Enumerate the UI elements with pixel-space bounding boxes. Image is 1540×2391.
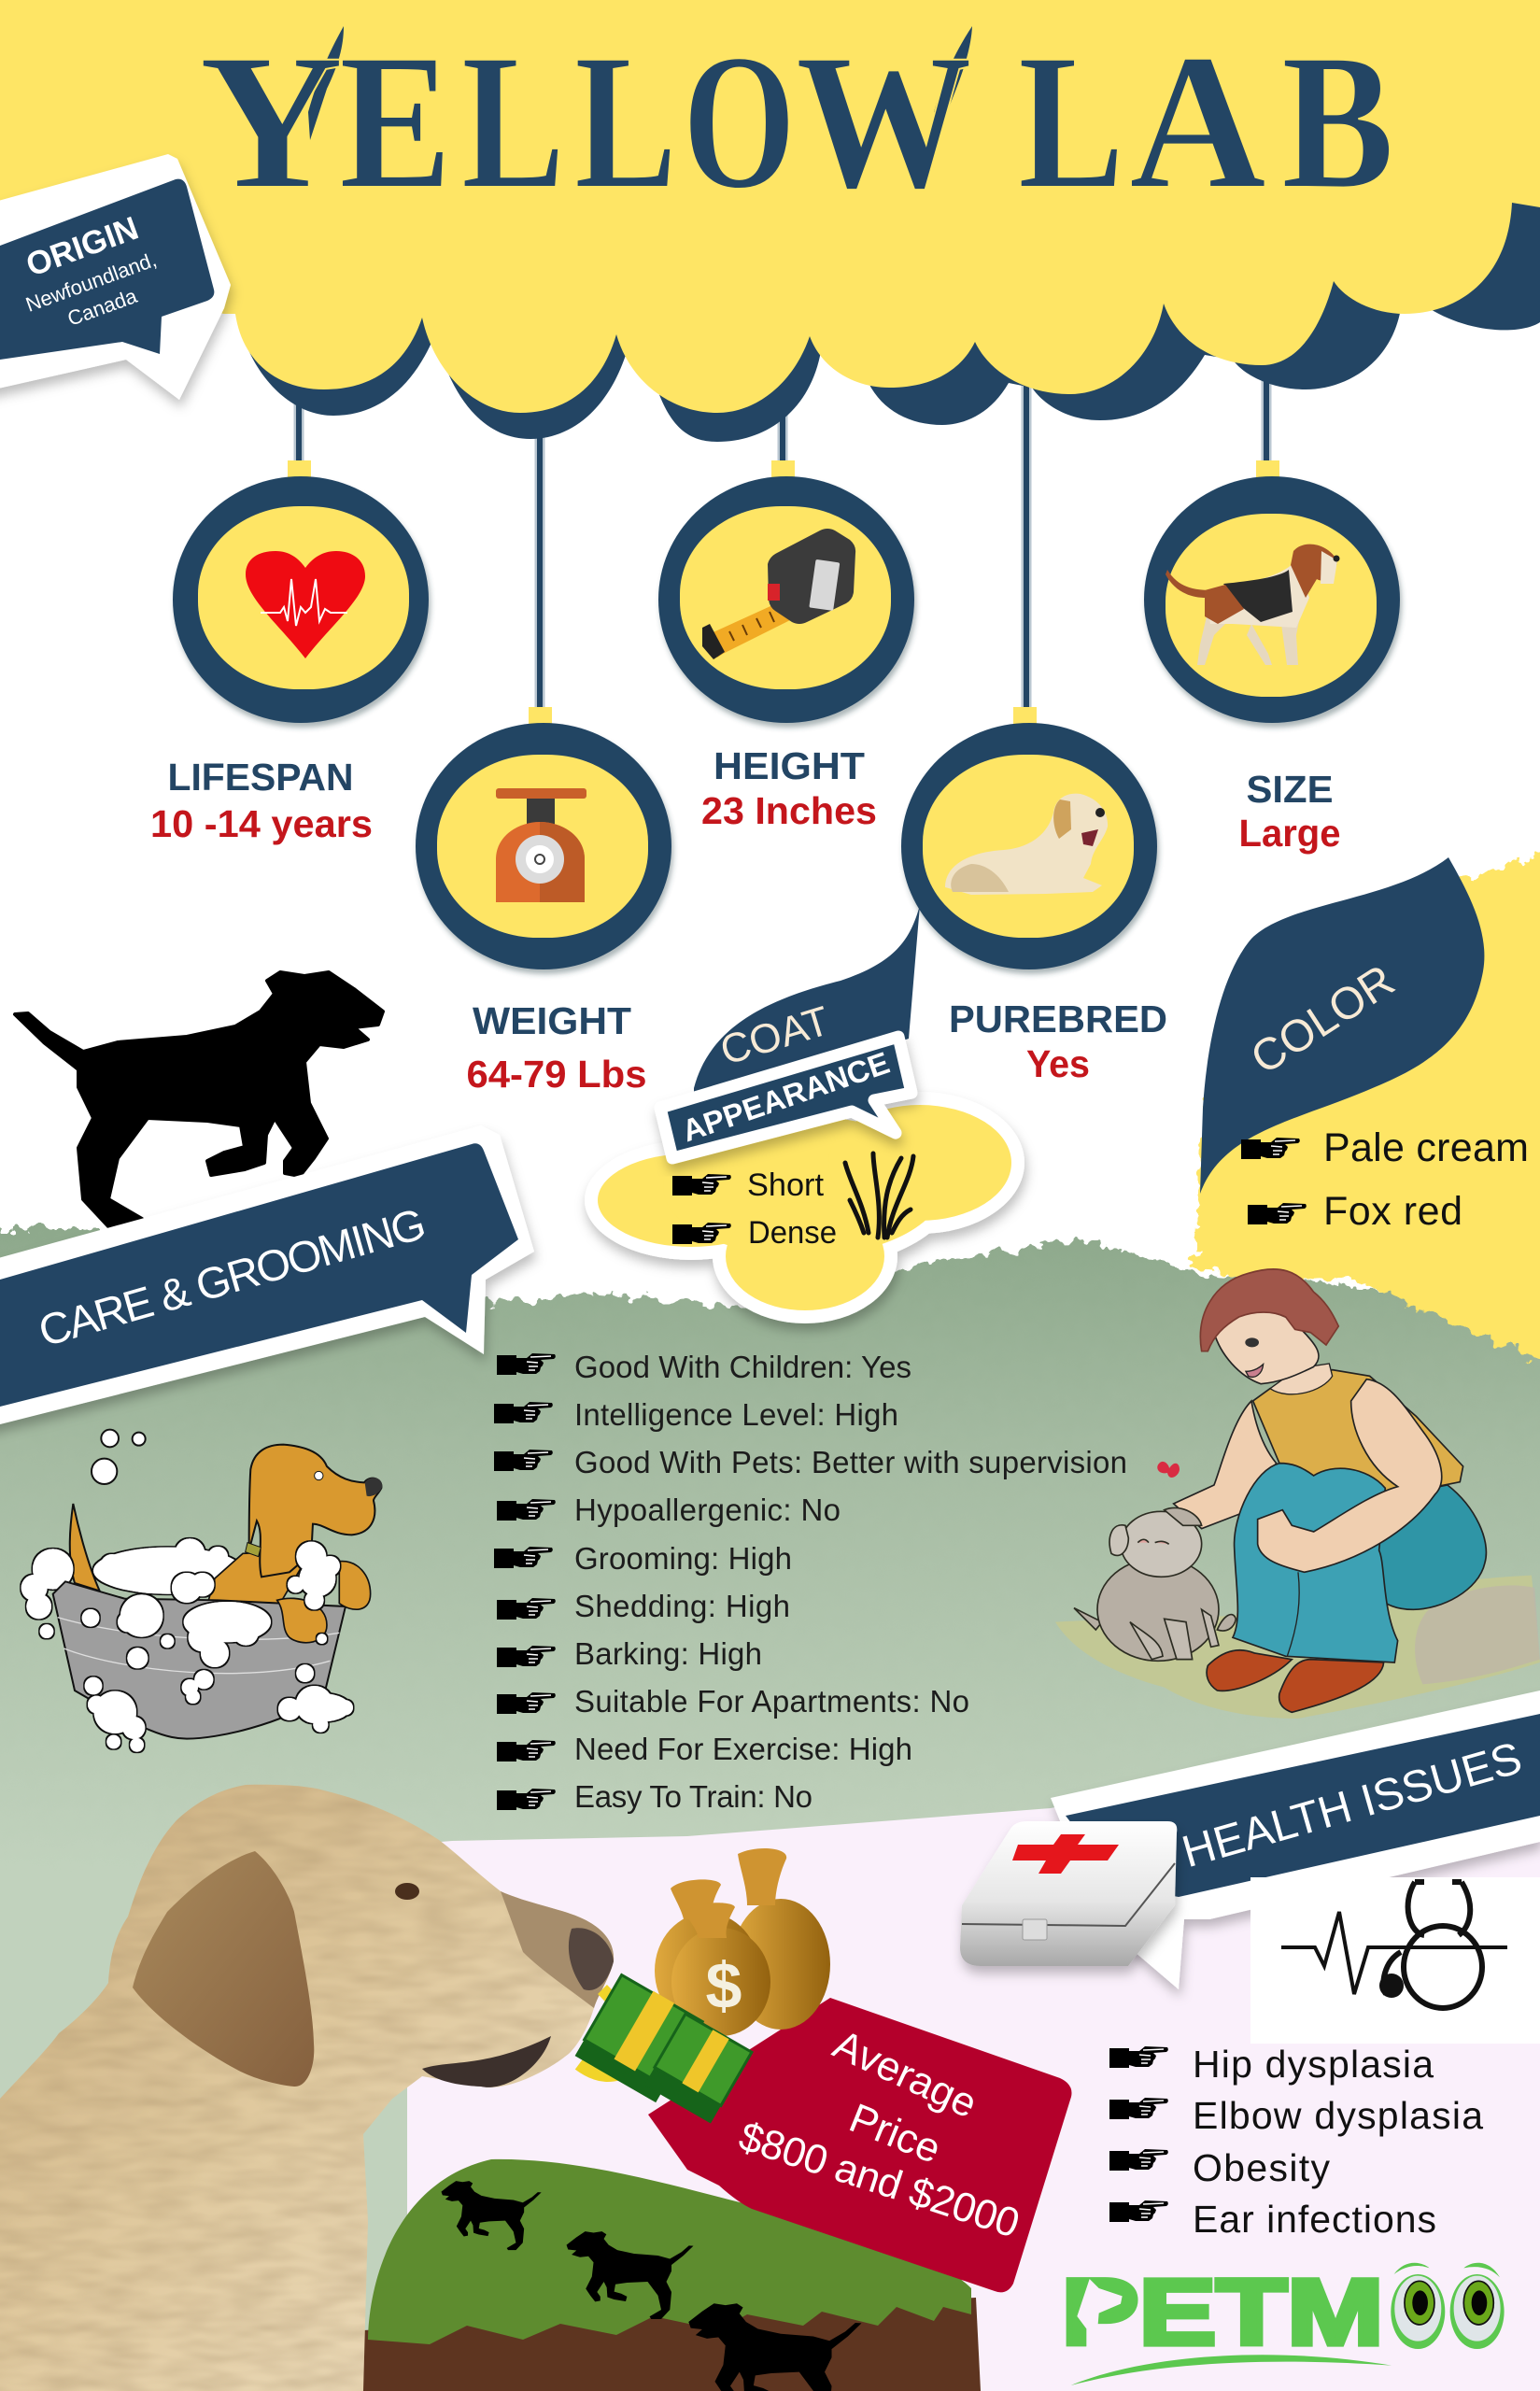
title: L xyxy=(461,14,565,229)
paws xyxy=(277,1562,371,1643)
dog head xyxy=(249,1445,381,1577)
heading: PUREBRED xyxy=(949,997,1167,1040)
appearance banner: APPEARANCE xyxy=(678,1045,894,1148)
icon: beagle xyxy=(1166,545,1339,665)
icon: scale xyxy=(496,788,586,902)
label: weight xyxy=(467,999,646,1096)
neck xyxy=(1270,1364,1333,1394)
body xyxy=(0,1785,614,2391)
front foam xyxy=(82,1542,353,1752)
ground patch xyxy=(1055,1576,1540,1719)
cap xyxy=(1013,707,1037,726)
panel: green meadow background xyxy=(0,1228,1540,2391)
dog body xyxy=(208,1550,311,1604)
label: purebred xyxy=(949,997,1167,1085)
height medallion xyxy=(658,460,914,723)
bullet: dense xyxy=(672,1215,837,1251)
banner: origin xyxy=(0,154,231,400)
stethoscope xyxy=(1383,1882,1482,2008)
illustration: dog in wash tub xyxy=(21,1430,382,1752)
size medallion xyxy=(1144,460,1400,723)
inner xyxy=(923,755,1134,938)
title: L xyxy=(1018,14,1124,229)
ring xyxy=(1144,476,1400,723)
item: Intelligence Level: High xyxy=(574,1397,898,1432)
bullet: fox red xyxy=(1248,1189,1462,1234)
title: W xyxy=(796,14,972,229)
label: size xyxy=(1238,768,1341,855)
care and grooming list xyxy=(494,1350,1127,1814)
heading: HEIGHT xyxy=(713,744,865,787)
back of pants xyxy=(1366,1485,1486,1609)
shirt xyxy=(1253,1370,1463,1501)
title xyxy=(199,14,1394,229)
tag body xyxy=(648,1998,1072,2292)
ring xyxy=(901,723,1157,969)
price tag xyxy=(648,1998,1072,2292)
weight medallion xyxy=(416,707,671,969)
front legs xyxy=(1233,1464,1398,1662)
item: Barking: High xyxy=(574,1636,762,1671)
origin place: Newfoundland, xyxy=(22,248,160,317)
title: B xyxy=(1281,14,1394,229)
dog xyxy=(688,2303,861,2391)
panel: hanging strings xyxy=(299,355,1266,710)
inner xyxy=(437,755,648,938)
value: Large xyxy=(1238,812,1341,855)
color label: COLOR xyxy=(1243,955,1404,1084)
nose xyxy=(569,1928,614,1990)
coat label: COAT xyxy=(715,997,835,1074)
item: Ear infections xyxy=(1193,2198,1436,2241)
title: O xyxy=(683,14,796,229)
nose xyxy=(365,1478,382,1496)
panel: pale pink lower background xyxy=(407,1709,1540,2391)
tag line two: Price xyxy=(843,2095,947,2172)
tag line three: $800 and $2000 xyxy=(734,2114,1024,2247)
leg divide xyxy=(1287,1572,1299,1656)
bullet: short xyxy=(672,1167,825,1203)
banner body xyxy=(1066,1714,1540,1897)
health issues list xyxy=(1109,2043,1483,2241)
label: lifespan xyxy=(150,756,373,845)
banner label: HEALTH ISSUES xyxy=(1177,1733,1527,1877)
inner xyxy=(1166,514,1377,697)
icon: heart xyxy=(246,551,365,658)
tail xyxy=(70,1504,100,1591)
title: E xyxy=(339,14,452,229)
heading: LIFESPAN xyxy=(168,756,353,799)
swoosh xyxy=(1071,2355,1392,2385)
icon: black dog silhouette xyxy=(15,972,383,1226)
item xyxy=(1109,2146,1330,2189)
puppy xyxy=(1074,1508,1236,1661)
bag front xyxy=(671,1903,770,2036)
title: Y xyxy=(199,14,344,229)
banner body xyxy=(0,1143,518,1407)
banner label: CARE & GROOMING xyxy=(33,1198,431,1356)
illustration: money bags and cash xyxy=(575,1848,830,2131)
inner xyxy=(680,506,891,689)
head xyxy=(1214,1311,1319,1384)
collar xyxy=(246,1543,261,1557)
logo: petmoo xyxy=(1062,2260,1505,2385)
icon: lab lying down xyxy=(945,794,1108,895)
item: Hypoallergenic: No xyxy=(574,1493,841,1527)
item: Need For Exercise: High xyxy=(574,1732,912,1766)
dog xyxy=(441,2181,542,2250)
value: 10 -14 years xyxy=(150,802,373,845)
color leaf xyxy=(1200,857,1484,1194)
illustration: hill with running dogs xyxy=(344,2159,981,2391)
eyes xyxy=(1391,2263,1505,2349)
title: L xyxy=(574,14,677,229)
bullet: short: Short xyxy=(747,1167,825,1203)
grass top xyxy=(368,2159,971,2344)
heading: SIZE xyxy=(1246,768,1334,811)
bullet: fox red: Fox red xyxy=(1323,1189,1462,1234)
panel: stethoscope xyxy=(1250,1877,1540,2044)
ring xyxy=(416,723,671,969)
icon: tape measure xyxy=(702,529,855,659)
coat leaf xyxy=(694,905,920,1111)
value: 64-79 Lbs xyxy=(467,1053,646,1096)
illustration: yellow labrador portrait xyxy=(0,1785,614,2391)
label: height xyxy=(701,744,877,832)
origin label: ORIGIN xyxy=(21,210,143,284)
value: Yes xyxy=(1026,1042,1090,1085)
item: Hip dysplasia xyxy=(1193,2043,1434,2086)
wordmark: PETM xyxy=(1062,2260,1384,2365)
cap xyxy=(771,460,795,479)
bag back xyxy=(731,1848,830,2030)
ring xyxy=(658,476,914,723)
eye xyxy=(395,1883,419,1900)
origin place line two: Canada xyxy=(64,284,141,331)
cap xyxy=(288,460,311,479)
shoes xyxy=(1207,1650,1292,1691)
item: Suitable For Apartments: No xyxy=(574,1684,969,1719)
icon: grass xyxy=(845,1153,913,1238)
title: A xyxy=(1129,14,1266,229)
banner: health issues xyxy=(1051,1691,1540,1989)
bullet: dense: Dense xyxy=(748,1215,837,1251)
dog cut-out in the P xyxy=(1077,2279,1123,2361)
bubbles xyxy=(92,1430,146,1484)
cap xyxy=(1256,460,1279,479)
panel: coat appearance xyxy=(585,905,1024,1323)
grey wash xyxy=(1415,1586,1540,1684)
tub xyxy=(53,1581,346,1739)
dollar signs: $ xyxy=(706,1949,742,2022)
cash stack xyxy=(575,1974,754,2131)
panel: yellow color block xyxy=(1195,845,1540,1373)
item: Good With Pets: Better with supervision xyxy=(574,1445,1127,1479)
item: Easy To Train: No xyxy=(574,1779,812,1814)
illustration: child petting puppy xyxy=(1055,1269,1540,1719)
purebred medallion xyxy=(901,707,1157,969)
ribbon xyxy=(579,1989,654,2075)
mouth xyxy=(422,2036,551,2087)
item: Grooming: High xyxy=(574,1541,792,1576)
bullet: pale cream: Pale cream xyxy=(1323,1125,1529,1170)
inner xyxy=(198,506,409,689)
item: Obesity xyxy=(1193,2146,1330,2189)
face details xyxy=(1245,1337,1259,1347)
ecg line xyxy=(1281,1912,1507,1994)
panel: yellow scalloped header xyxy=(0,0,1540,413)
arm front xyxy=(1258,1379,1442,1572)
item: Good With Children: Yes xyxy=(574,1350,911,1384)
item: Elbow dysplasia xyxy=(1193,2094,1483,2137)
decorative navy scallop shadow xyxy=(235,187,1540,442)
heading: WEIGHT xyxy=(473,999,631,1042)
yellow cloud xyxy=(585,1092,1024,1323)
tag line one: Average xyxy=(827,2021,983,2128)
arm back xyxy=(1174,1401,1277,1529)
panel: color xyxy=(1200,857,1529,1234)
soil xyxy=(344,2298,981,2391)
cap xyxy=(529,707,552,726)
icon: first aid kit xyxy=(960,1821,1177,1966)
hair xyxy=(1200,1269,1338,1351)
dog xyxy=(567,2231,693,2319)
origin banner body xyxy=(0,179,214,360)
ring xyxy=(173,476,429,723)
banner: care and grooming xyxy=(0,1125,534,1429)
value: 23 Inches xyxy=(701,789,877,832)
bag left xyxy=(655,1879,759,2029)
item: Shedding: High xyxy=(574,1589,790,1623)
back foam xyxy=(21,1538,243,1638)
icon: red heart xyxy=(1157,1462,1180,1478)
lifespan medallion xyxy=(173,460,429,723)
ear xyxy=(133,1851,314,2087)
muzzle shade xyxy=(501,1891,614,2008)
